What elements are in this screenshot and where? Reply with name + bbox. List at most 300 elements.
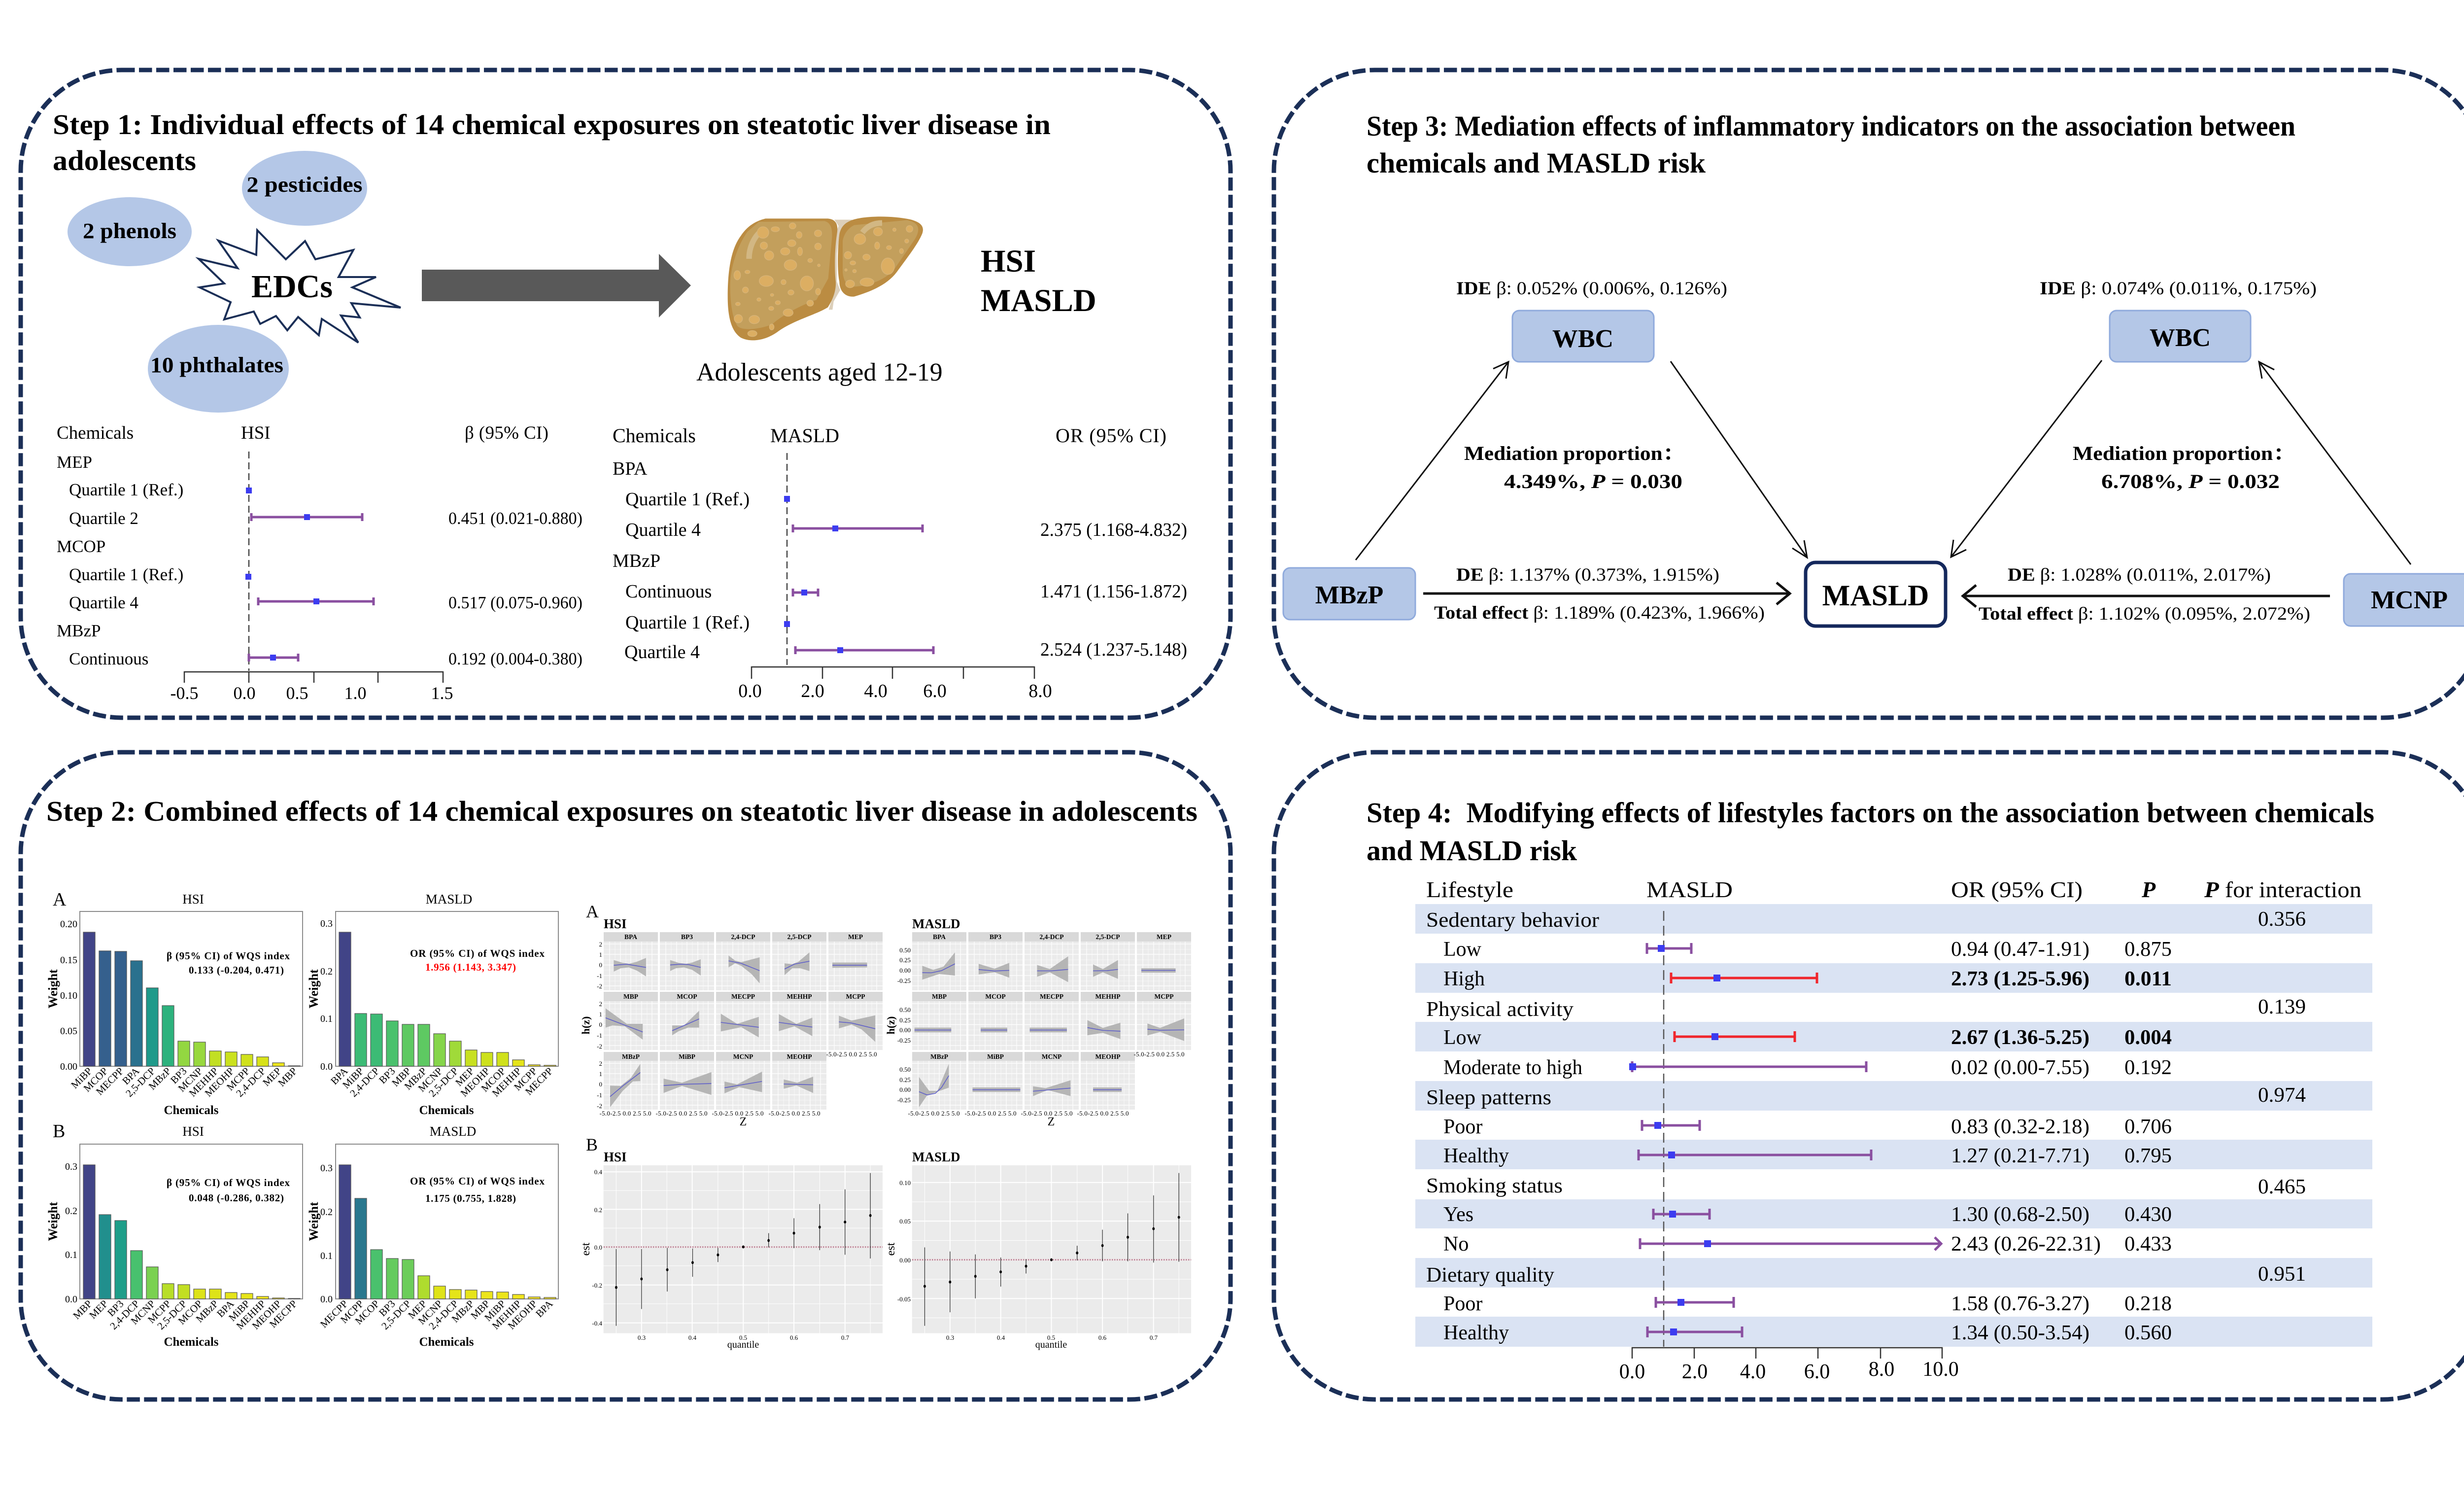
chart: quantile HSI: 0.7 — [841, 1334, 850, 1341]
bar chart: A MASLD: MEOHP — [458, 1065, 492, 1099]
bar chart: A HSI: BP3 — [168, 1065, 189, 1086]
bubble: 2 pesticides: 2 pesticides — [246, 173, 363, 197]
chart: quantile MASLD: 0.3 — [946, 1334, 954, 1341]
small multiples: BKMR HSI: 0 — [599, 1081, 602, 1088]
forest plot HSI text: Chemicals — [57, 423, 134, 443]
table OR values: 1.27 (0.21-7.71) — [1951, 1145, 2089, 1167]
table OR values: 2.73 (1.25-5.96) — [1951, 968, 2089, 990]
small multiples: BKMR HSI: Z — [740, 1116, 747, 1128]
chart: quantile MASLD: MASLD — [912, 1150, 960, 1164]
forest plot MASLD text: MBzP — [613, 551, 660, 571]
node: MBzP: MBzP — [1315, 581, 1383, 609]
bar chart: B MASLD: MBzP — [449, 1298, 477, 1325]
table P for interaction values: 0.974 — [2258, 1084, 2306, 1107]
arrow: MCNP to WBC — [2259, 362, 2411, 564]
table row labels: High — [1443, 968, 1485, 990]
small multiples: BKMR HSI: 0 — [599, 961, 602, 969]
node: WBC left — [1512, 311, 1654, 362]
bar chart: A MASLD: MECPP — [523, 1065, 555, 1097]
forest plot: HSI — [57, 423, 582, 703]
forest plot: HSI: 1.5 — [431, 683, 453, 703]
chart: quantile MASLD — [885, 1150, 1191, 1350]
chart: quantile MASLD: 0.10 — [899, 1179, 911, 1187]
outcome labels: HSI — [981, 244, 1036, 279]
chart: quantile HSI: 0.3 — [638, 1334, 646, 1341]
bar chart: A MASLD: 1.956 (1.143, 3.347) — [425, 961, 516, 973]
table header: P — [2141, 877, 2156, 902]
bar chart: A HSI: MCOP — [81, 1065, 110, 1094]
forest plot HSI text: MEP — [57, 453, 92, 472]
bar chart: A HSI: 0.20 — [60, 919, 77, 930]
small multiples: BKMR HSI: -5.0-2.5 0.0 2.5 5.0 — [599, 1110, 651, 1117]
bar chart: B HSI: MCPP — [145, 1298, 173, 1326]
small multiples: BKMR HSI: HSI — [604, 916, 627, 931]
forest plot: MASLD: 4.0 — [864, 681, 888, 701]
step 1 heading: adolescents — [53, 144, 196, 176]
bar chart: A HSI: 0.10 — [60, 990, 77, 1001]
label A (BKMR): A — [586, 902, 599, 921]
chart: quantile HSI: 0.5 — [739, 1334, 747, 1341]
arrow: MCNP to MASLD — [1963, 585, 2330, 607]
bar chart: B HSI: Weight — [46, 1202, 60, 1241]
table row labels: Sleep patterns — [1426, 1086, 1551, 1109]
chart: quantile MASLD: est — [885, 1242, 897, 1256]
bar chart: A MASLD: MBzP — [402, 1065, 429, 1092]
forest plot HSI text: Quartile 1 (Ref.) — [69, 480, 183, 499]
step 4 heading: and MASLD risk — [1367, 835, 1577, 867]
forest plot MASLD text: Continuous — [625, 581, 712, 602]
bar chart: B HSI: MEOHP — [250, 1298, 284, 1332]
node: MASLD — [1806, 562, 1946, 626]
outcome labels: MASLD — [981, 283, 1096, 318]
forest plot MASLD text: MASLD — [770, 424, 839, 447]
bar chart: B HSI: BPA — [214, 1297, 237, 1320]
small multiples: BKMR MASLD — [885, 916, 1191, 1128]
table OR values: 1.58 (0.76-3.27) — [1951, 1292, 2089, 1315]
forest plot: lifestyle MASLD: 2.0 — [1682, 1361, 1708, 1383]
table P values: 0.795 — [2124, 1145, 2172, 1167]
bar chart: B MASLD: 2,5-DCP — [379, 1298, 413, 1332]
small multiples: BKMR MASLD: -0.25 — [897, 1037, 911, 1044]
bar chart: B MASLD: MECPP — [318, 1298, 350, 1330]
table row labels: Sedentary behavior — [1426, 909, 1599, 932]
bar chart: A HSI: MECPP — [94, 1065, 126, 1097]
bar chart: A HSI: MEOHP — [203, 1065, 237, 1099]
bar chart: A MASLD: MASLD — [426, 892, 472, 907]
step 4 heading — [1367, 797, 2374, 867]
bar chart: B MASLD: MEOHP — [506, 1298, 540, 1332]
forest plot: HSI: 0.0 — [234, 683, 255, 703]
bar chart: B HSI: 0.2 — [65, 1206, 77, 1217]
bar chart: A MASLD: MCNP — [415, 1065, 445, 1094]
bar chart: A HSI — [46, 892, 303, 1117]
small multiples: BKMR HSI: MCNP — [733, 1053, 753, 1060]
small multiples: BKMR HSI: MECPP — [731, 993, 755, 1000]
bar chart: B MASLD: MEP — [406, 1298, 429, 1321]
forest plot: lifestyle MASLD: 10.0 — [1922, 1358, 1959, 1381]
bar chart: A MASLD: 0.2 — [320, 966, 333, 977]
bar chart: B MASLD: MASLD — [430, 1124, 476, 1139]
arrow: WBC to MASLD right — [1951, 360, 2102, 557]
table P values — [2124, 938, 2172, 1344]
outcome labels — [981, 244, 1096, 318]
step 3 heading: Step 3: Mediation effects of inflammatory indicators on the association between — [1367, 110, 2295, 142]
small multiples: BKMR HSI: -5.0-2.5 0.0 2.5 5.0 — [712, 1110, 764, 1117]
table P values: 0.218 — [2124, 1292, 2172, 1315]
bar chart: A MASLD: BP3 — [376, 1065, 398, 1086]
small multiples: BKMR MASLD: 0.25 — [899, 1016, 911, 1024]
bar chart: B MASLD: 0.2 — [320, 1207, 333, 1218]
label B (quantile): B — [586, 1135, 598, 1154]
bar chart: B MASLD: 0.1 — [320, 1251, 333, 1261]
bar chart: A HSI: 0.05 — [60, 1026, 77, 1037]
bar chart: A HSI: Weight — [46, 969, 60, 1009]
chart: quantile MASLD: 0.6 — [1098, 1334, 1107, 1341]
step 1 heading: Step 1: Individual effects of 14 chemical exposures on steatotic liver disease in — [53, 108, 1051, 140]
bar chart: B HSI: 0.048 (-0.286, 0.382) — [189, 1192, 284, 1204]
chart: quantile MASLD: 0.4 — [997, 1334, 1005, 1341]
bar chart: B MASLD: 2,4-DCP — [426, 1298, 461, 1332]
direct and total effect right: Total effect β: 1.102% (0.095%, 2.072%) — [1979, 604, 2310, 624]
chart: quantile HSI: -0.4 — [592, 1320, 602, 1327]
table row labels: Poor — [1443, 1116, 1482, 1138]
small multiples: BKMR MASLD: 0.50 — [899, 946, 911, 954]
forest plot HSI text: MBzP — [57, 621, 101, 640]
bar chart: A HSI: MEHHP — [187, 1065, 221, 1099]
small multiples: BKMR MASLD: -5.0-2.5 0.0 2.5 5.0 — [1077, 1110, 1129, 1117]
arrow: MBzP to WBC — [1356, 362, 1508, 560]
small multiples: BKMR HSI: h(z) — [580, 1016, 592, 1034]
small multiples: BKMR HSI: -1 — [597, 972, 602, 979]
table P for interaction values: 0.951 — [2258, 1263, 2306, 1286]
forest plot MASLD text: Chemicals — [613, 424, 696, 447]
small multiples: BKMR MASLD: MEOHP — [1095, 1053, 1121, 1060]
node: WBC right — [2110, 311, 2251, 362]
small multiples: BKMR HSI: MEOHP — [787, 1053, 812, 1060]
small multiples: BKMR HSI: MCPP — [846, 993, 865, 1000]
forest plot HSI text: MCOP — [57, 537, 105, 556]
small multiples: BKMR HSI: -1 — [597, 1091, 602, 1099]
small multiples: BKMR MASLD: 2,5-DCP — [1095, 933, 1120, 941]
bubble: 10 phthalates — [148, 325, 289, 413]
chart: quantile HSI: 0.4 — [688, 1334, 697, 1341]
small multiples: BKMR HSI: MEP — [848, 933, 863, 941]
forest plot MASLD text: 2.375 (1.168-4.832) — [1040, 520, 1187, 540]
small multiples: BKMR HSI: -2 — [597, 1043, 602, 1050]
table header: P for interaction — [2204, 877, 2361, 902]
direct and total effect right — [1979, 565, 2310, 624]
forest plot: lifestyle MASLD: 6.0 — [1804, 1361, 1830, 1383]
forest plot HSI text: β (95% CI) — [465, 423, 548, 443]
chart: quantile MASLD: 0.7 — [1150, 1334, 1158, 1341]
bar chart: B HSI: MBzP — [194, 1298, 221, 1325]
node: MBzP — [1283, 568, 1415, 620]
chart: quantile HSI: HSI — [604, 1150, 627, 1164]
bar chart: A HSI: 2,5-DCP — [123, 1065, 158, 1099]
bubble: 2 phenols — [68, 197, 192, 266]
small multiples: BKMR HSI: 2,5-DCP — [787, 933, 812, 941]
bar chart: A MASLD: MCOP — [479, 1065, 508, 1094]
forest plot MASLD text: Quartile 1 (Ref.) — [625, 489, 750, 510]
small multiples: BKMR MASLD: 0.00 — [899, 1026, 911, 1034]
small multiples: BKMR MASLD: MCNP — [1042, 1053, 1061, 1060]
chart: quantile HSI: 0.4 — [594, 1168, 602, 1176]
table row labels: No — [1443, 1233, 1469, 1256]
bar chart: A HSI: MBzP — [146, 1065, 173, 1092]
table row labels: Moderate to high — [1443, 1056, 1582, 1079]
small multiples: BKMR MASLD: Z — [1048, 1116, 1055, 1128]
forest plot MASLD text: Quartile 4 — [625, 520, 701, 540]
bar chart: A MASLD: MEHHP — [490, 1065, 524, 1099]
chart: quantile MASLD: 0.00 — [899, 1257, 911, 1264]
chart: quantile HSI: 0.2 — [594, 1206, 602, 1214]
forest plot MASLD text: BPA — [613, 458, 648, 479]
table header: Lifestyle — [1426, 877, 1513, 902]
table P values: 0.875 — [2124, 938, 2172, 961]
bar chart: B HSI: 2,5-DCP — [155, 1298, 189, 1332]
bar chart: A MASLD: 0.3 — [320, 918, 333, 929]
small multiples: BKMR HSI — [580, 916, 883, 1128]
small multiples: BKMR MASLD: MCPP — [1155, 993, 1173, 1000]
forest plot HSI text: 0.517 (0.075-0.960) — [448, 593, 582, 612]
bar chart: B HSI: β (95% CI) of WQS index — [167, 1177, 290, 1188]
small multiples: BKMR HSI: -2 — [597, 1102, 602, 1110]
forest plot: MASLD: 2.0 — [801, 681, 824, 701]
forest plot HSI text: 0.451 (0.021-0.880) — [448, 509, 582, 528]
node: WBC left: WBC — [1552, 325, 1613, 353]
caption: adolescents aged 12-19: Adolescents aged 12-19 — [696, 358, 943, 386]
table row labels: Low — [1443, 938, 1482, 961]
forest plot HSI text: HSI — [241, 423, 271, 443]
bar chart: B HSI: 2,4-DCP — [107, 1298, 142, 1332]
table header: OR (95% CI) — [1951, 877, 2083, 902]
bar chart: B MASLD: MEHHP — [490, 1298, 524, 1332]
small multiples: BKMR HSI: 2 — [599, 1000, 602, 1008]
small multiples: BKMR MASLD: 0.50 — [899, 1006, 911, 1013]
table row labels: Low — [1443, 1026, 1482, 1049]
chart: quantile MASLD: quantile — [1035, 1339, 1067, 1350]
bar chart: A HSI: HSI — [182, 892, 204, 907]
bar chart: B MASLD: MCPP — [338, 1298, 366, 1326]
small multiples: BKMR MASLD: MCOP — [985, 993, 1006, 1000]
small multiples: BKMR MASLD: MEP — [1157, 933, 1171, 941]
small multiples: BKMR MASLD: MBzP — [930, 1053, 948, 1060]
small multiples: BKMR MASLD: 0.00 — [899, 967, 911, 974]
small multiples: BKMR MASLD: 0.50 — [899, 1066, 911, 1073]
bar chart: B HSI: HSI — [182, 1124, 204, 1139]
forest plot HSI text — [57, 423, 582, 668]
table P values: 0.706 — [2124, 1116, 2172, 1138]
table OR values — [1951, 938, 2101, 1344]
bar chart: B HSI: MCOP — [175, 1298, 205, 1327]
bar chart: B HSI: 0.3 — [65, 1161, 77, 1172]
small multiples: BKMR HSI: -1 — [597, 1032, 602, 1039]
small multiples: BKMR HSI: MEHHP — [787, 993, 812, 1000]
small multiples: BKMR MASLD: 0.25 — [899, 956, 911, 964]
direct and total effect left: Total effect β: 1.189% (0.423%, 1.966%) — [1434, 603, 1765, 623]
bar chart: B MASLD: MiBP — [482, 1298, 508, 1324]
step 2 heading: Step 2: Combined effects of 14 chemical exposures on steatotic liver disease in adolescents — [46, 795, 1198, 827]
table P values: 0.192 — [2124, 1056, 2172, 1079]
bar chart: A MASLD: 2,4-DCP — [347, 1065, 382, 1099]
table OR values: 0.94 (0.47-1.91) — [1951, 938, 2089, 961]
bar chart: B HSI: MBP — [70, 1298, 95, 1322]
small multiples: BKMR MASLD: 0.25 — [899, 1076, 911, 1083]
forest plot MASLD text: OR (95% CI) — [1056, 424, 1166, 447]
table row labels — [1426, 909, 1599, 1344]
table header — [1426, 877, 2361, 902]
table row labels: Smoking status — [1426, 1175, 1563, 1197]
forest plot HSI text: 0.192 (0.004-0.380) — [448, 649, 582, 668]
table OR values: 1.30 (0.68-2.50) — [1951, 1203, 2089, 1226]
bar chart: A HSI: 2,4-DCP — [234, 1065, 268, 1099]
icon: fatty liver — [728, 216, 923, 340]
small multiples: BKMR HSI: 0 — [599, 1021, 602, 1028]
bar chart: A HSI: Chemicals — [164, 1104, 219, 1117]
EDCs starburst: EDCs — [251, 269, 333, 305]
table row labels: Physical activity — [1426, 998, 1574, 1021]
panel: step 1 individual effects — [21, 70, 1231, 718]
table P for interaction values: 0.139 — [2258, 996, 2306, 1018]
chart: quantile MASLD: 0.05 — [899, 1218, 911, 1225]
bar chart: B MASLD: Weight — [307, 1202, 321, 1241]
mediation proportion left: 4.349%, P = 0.030 — [1504, 470, 1682, 492]
small multiples: BKMR MASLD: BPA — [933, 933, 946, 941]
small multiples: BKMR MASLD: 2,4-DCP — [1039, 933, 1064, 941]
forest plot HSI text: Quartile 4 — [69, 593, 138, 612]
table row labels: Dietary quality — [1426, 1264, 1554, 1287]
table P values: 0.004 — [2124, 1026, 2172, 1049]
label: indirect effect left: IDE β: 0.052% (0.006%, 0.126%) — [1456, 279, 1727, 299]
small multiples: BKMR HSI: 2 — [599, 1060, 602, 1067]
EDCs starburst — [199, 230, 401, 343]
small multiples: BKMR MASLD: MBP — [932, 993, 947, 1000]
bar chart: B HSI: MEHHP — [234, 1298, 268, 1332]
bar chart: A MASLD: BPA — [328, 1065, 350, 1087]
table OR values: 0.02 (0.00-7.55) — [1951, 1056, 2089, 1079]
bar chart: A HSI: BPA — [120, 1065, 142, 1087]
table row labels: Poor — [1443, 1292, 1482, 1315]
small multiples: BKMR MASLD: BP3 — [990, 933, 1001, 941]
table P values: 0.433 — [2124, 1233, 2172, 1256]
forest plot: lifestyle MASLD: 0.0 — [1619, 1361, 1645, 1383]
small multiples: BKMR HSI: 1 — [599, 951, 602, 958]
bar chart: B MASLD: OR (95% CI) of WQS index — [410, 1175, 545, 1187]
bar chart: A HSI: MiBP — [68, 1065, 95, 1091]
forest plot: lifestyle MASLD: 4.0 — [1740, 1361, 1766, 1383]
table row labels: Healthy — [1443, 1322, 1509, 1344]
forest plot HSI text: Continuous — [69, 649, 148, 668]
small multiples: BKMR HSI: MBP — [623, 993, 638, 1000]
forest plot: lifestyle MASLD: 8.0 — [1869, 1358, 1894, 1381]
chart: quantile HSI: quantile — [727, 1339, 759, 1350]
bubble: 2 phenols: 2 phenols — [83, 219, 176, 243]
node: MCNP — [2344, 574, 2464, 626]
bar chart: B HSI — [46, 1124, 303, 1349]
forest plot: MASLD: 8.0 — [1028, 681, 1052, 701]
bar chart: A MASLD: 2,5-DCP — [426, 1065, 461, 1099]
small multiples: BKMR HSI: -5.0-2.5 0.0 2.5 5.0 — [826, 1050, 877, 1058]
table P values: 0.430 — [2124, 1203, 2172, 1226]
table OR values: 1.34 (0.50-3.54) — [1951, 1322, 2089, 1344]
bar chart: B HSI: BP3 — [105, 1298, 126, 1319]
forest plot: MASLD — [613, 424, 1187, 701]
small multiples: BKMR MASLD: MEHHP — [1095, 993, 1121, 1000]
small multiples: BKMR MASLD: -5.0-2.5 0.0 2.5 5.0 — [1021, 1110, 1072, 1117]
small multiples: BKMR HSI: 2,4-DCP — [731, 933, 755, 941]
bar chart: B MASLD: Chemicals — [419, 1335, 474, 1349]
mediation proportion left — [1464, 442, 1684, 492]
forest plot: HSI: 1.0 — [344, 683, 367, 703]
forest plot MASLD text: Quartile 4 — [624, 642, 700, 663]
step 3 heading: chemicals and MASLD risk — [1367, 147, 1706, 179]
bar chart: B MASLD: 1.175 (0.755, 1.828) — [425, 1192, 516, 1204]
panel: step 4 modifying effects — [1274, 752, 2464, 1399]
table row labels: Yes — [1443, 1203, 1473, 1226]
chart: quantile HSI: 0.0 — [594, 1244, 602, 1251]
small multiples: BKMR MASLD: MASLD — [912, 916, 960, 931]
bar chart: A MASLD: OR (95% CI) of WQS index — [410, 947, 545, 959]
small multiples: BKMR HSI: MCOP — [677, 993, 697, 1000]
small multiples: BKMR HSI: 1 — [599, 1011, 602, 1018]
mediation proportion left: Mediation proportion： — [1464, 442, 1684, 464]
bar chart: B HSI: MiBP — [226, 1298, 252, 1324]
table P for interaction values: 0.356 — [2258, 908, 2306, 931]
bar chart: B HSI: MEP — [87, 1298, 110, 1321]
small multiples: BKMR HSI: -5.0-2.5 0.0 2.5 5.0 — [655, 1110, 708, 1117]
bar chart: A MASLD: MiBP — [340, 1065, 366, 1091]
small multiples: BKMR MASLD: -5.0-2.5 0.0 2.5 5.0 — [1133, 1050, 1185, 1058]
forest plot HSI text: Quartile 2 — [69, 509, 138, 528]
step 4 heading: Step 4: Modifying effects of lifestyles factors on the association between chemicals — [1367, 797, 2374, 829]
bar chart: B HSI: 0.1 — [65, 1250, 77, 1260]
label A (WQS): A — [53, 889, 67, 910]
small multiples: BKMR HSI: MBzP — [622, 1053, 640, 1060]
table P for interaction values — [2258, 908, 2306, 1286]
small multiples: BKMR MASLD: -0.25 — [897, 1096, 911, 1104]
table row labels: Healthy — [1443, 1145, 1509, 1167]
panel: step 3 mediation effects — [1274, 70, 2464, 718]
mediation proportion right: Mediation proportion： — [2073, 442, 2294, 464]
label B (WQS): B — [53, 1121, 65, 1142]
bubble: 2 pesticides — [242, 151, 367, 226]
small multiples: BKMR MASLD: h(z) — [885, 1016, 897, 1034]
table OR values: 2.67 (1.36-5.25) — [1951, 1026, 2089, 1049]
big arrow — [422, 254, 691, 317]
small multiples: BKMR MASLD: -0.25 — [897, 977, 911, 984]
bar chart: A HSI: MEP — [260, 1065, 284, 1088]
bar chart: A HSI: MCPP — [224, 1065, 252, 1093]
forest plot MASLD text: 1.471 (1.156-1.872) — [1040, 581, 1187, 602]
bar chart: B HSI: Chemicals — [164, 1335, 219, 1349]
small multiples: BKMR HSI: BP3 — [681, 933, 693, 941]
step 3 heading — [1367, 110, 2295, 179]
bar chart: A MASLD: Chemicals — [419, 1104, 474, 1117]
table P values: 0.560 — [2124, 1322, 2172, 1344]
bar chart: B MASLD: MCNP — [415, 1298, 445, 1327]
panel: step 2 combined effects — [21, 752, 1231, 1399]
bar chart: B HSI: 0.0 — [65, 1294, 77, 1305]
bar chart: A HSI: MBP — [275, 1065, 300, 1089]
table OR values: 2.43 (0.26-22.31) — [1951, 1233, 2101, 1256]
chart: quantile HSI: est — [580, 1242, 592, 1256]
node: WBC right: WBC — [2150, 324, 2211, 352]
chart: quantile MASLD: 0.5 — [1047, 1334, 1055, 1341]
bar chart: B MASLD: MBP — [468, 1298, 492, 1322]
chart: quantile HSI: 0.6 — [790, 1334, 798, 1341]
chart: quantile MASLD: -0.05 — [897, 1295, 911, 1303]
bar chart: A MASLD: 0.1 — [320, 1013, 333, 1024]
